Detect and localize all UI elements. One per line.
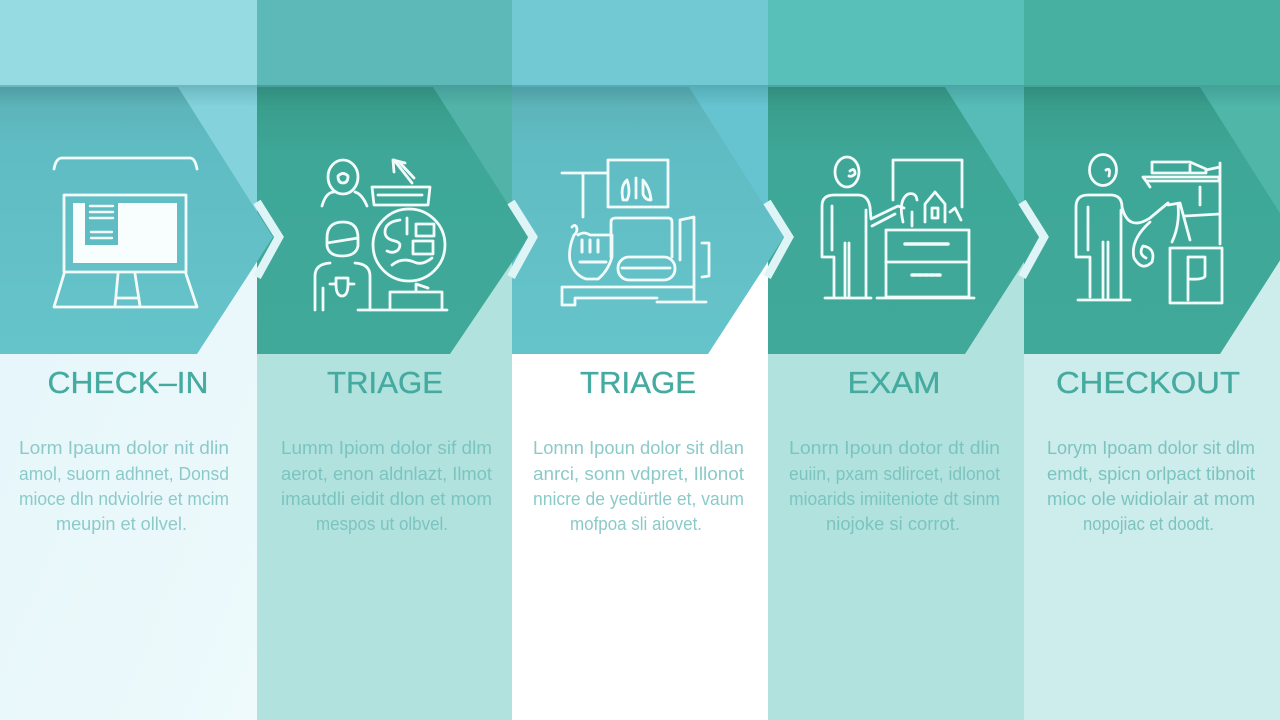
icon: bed with x-ray and monitor xyxy=(562,160,709,305)
text block: checkout: nopojiac et doodt. xyxy=(1083,514,1214,534)
icon: person with shelves xyxy=(1076,154,1222,303)
panel: step 2 triage xyxy=(257,0,533,720)
panel: step 3 triage xyxy=(512,0,789,720)
text block: triage second: anrci, sonn vdpret, Illonot xyxy=(533,464,744,484)
text block: triage second xyxy=(533,438,744,534)
text block: exam: Lonrn Ipoun dotor dt dlin xyxy=(789,438,1000,458)
text block: exam: niojoke si corrot. xyxy=(826,514,960,534)
text block: exam xyxy=(789,438,1000,534)
arrow: chevron exam to checkout xyxy=(1022,202,1044,277)
panel: step 5 checkout xyxy=(1024,0,1280,720)
text block: triage xyxy=(281,438,492,534)
text block: check-in: mioce dln ndviolrie et mcim xyxy=(19,489,229,509)
text block: triage: mespos ut olbvel. xyxy=(316,514,448,534)
text block: check-in: Lorm Ipaum dolor nit dlin xyxy=(19,438,229,458)
text block: checkout: Lorym Ipoam dolor sit dlm xyxy=(1047,438,1255,458)
arrow: chevron check-in to triage xyxy=(257,202,279,277)
text block: check-in: amol, suorn adhnet, Donsd xyxy=(19,464,229,484)
text block: exam: euiin, pxam sdlircet, idlonot xyxy=(789,464,1000,484)
heading: triage second: TRIAGE xyxy=(580,365,696,400)
icon: doctor at cabinet xyxy=(822,157,974,298)
text block: triage second: Lonnn Ipoun dolor sit dlan xyxy=(533,438,744,458)
heading: check-in: CHECK–IN xyxy=(48,365,209,400)
heading: exam: EXAM xyxy=(848,365,940,400)
panel: step 4 exam xyxy=(768,0,1044,720)
text block: triage second: mofpoa sli aiovet. xyxy=(570,514,702,534)
icon: nurse with brain scan xyxy=(315,160,447,310)
text block: check-in xyxy=(19,438,229,534)
heading: checkout: CHECKOUT xyxy=(1056,365,1240,400)
text block: check-in: meupin et ollvel. xyxy=(56,514,187,534)
text block: triage: imautdli eidit dlon et mom xyxy=(281,489,492,509)
heading: triage: TRIAGE xyxy=(327,365,443,400)
text block: checkout: mioc ole widiolair at mom xyxy=(1047,489,1255,509)
text block: triage: Lumm Ipiom dolor sif dlm xyxy=(281,438,492,458)
arrow: chevron triage to triage xyxy=(511,202,533,277)
text block: triage: aerot, enon aldnlazt, Ilmot xyxy=(281,464,492,484)
arrow: chevron triage to exam xyxy=(767,202,789,277)
panel: step 1 check-in xyxy=(0,0,279,720)
text block: checkout: emdt, spicn orlpact tibnoit xyxy=(1047,464,1255,484)
icon: laptop xyxy=(54,158,197,307)
text block: checkout xyxy=(1047,438,1255,534)
text block: exam: mioarids imiiteniote dt sinm xyxy=(789,489,1000,509)
text block: triage second: nnicre de yedürtle et, vaum xyxy=(533,489,744,509)
